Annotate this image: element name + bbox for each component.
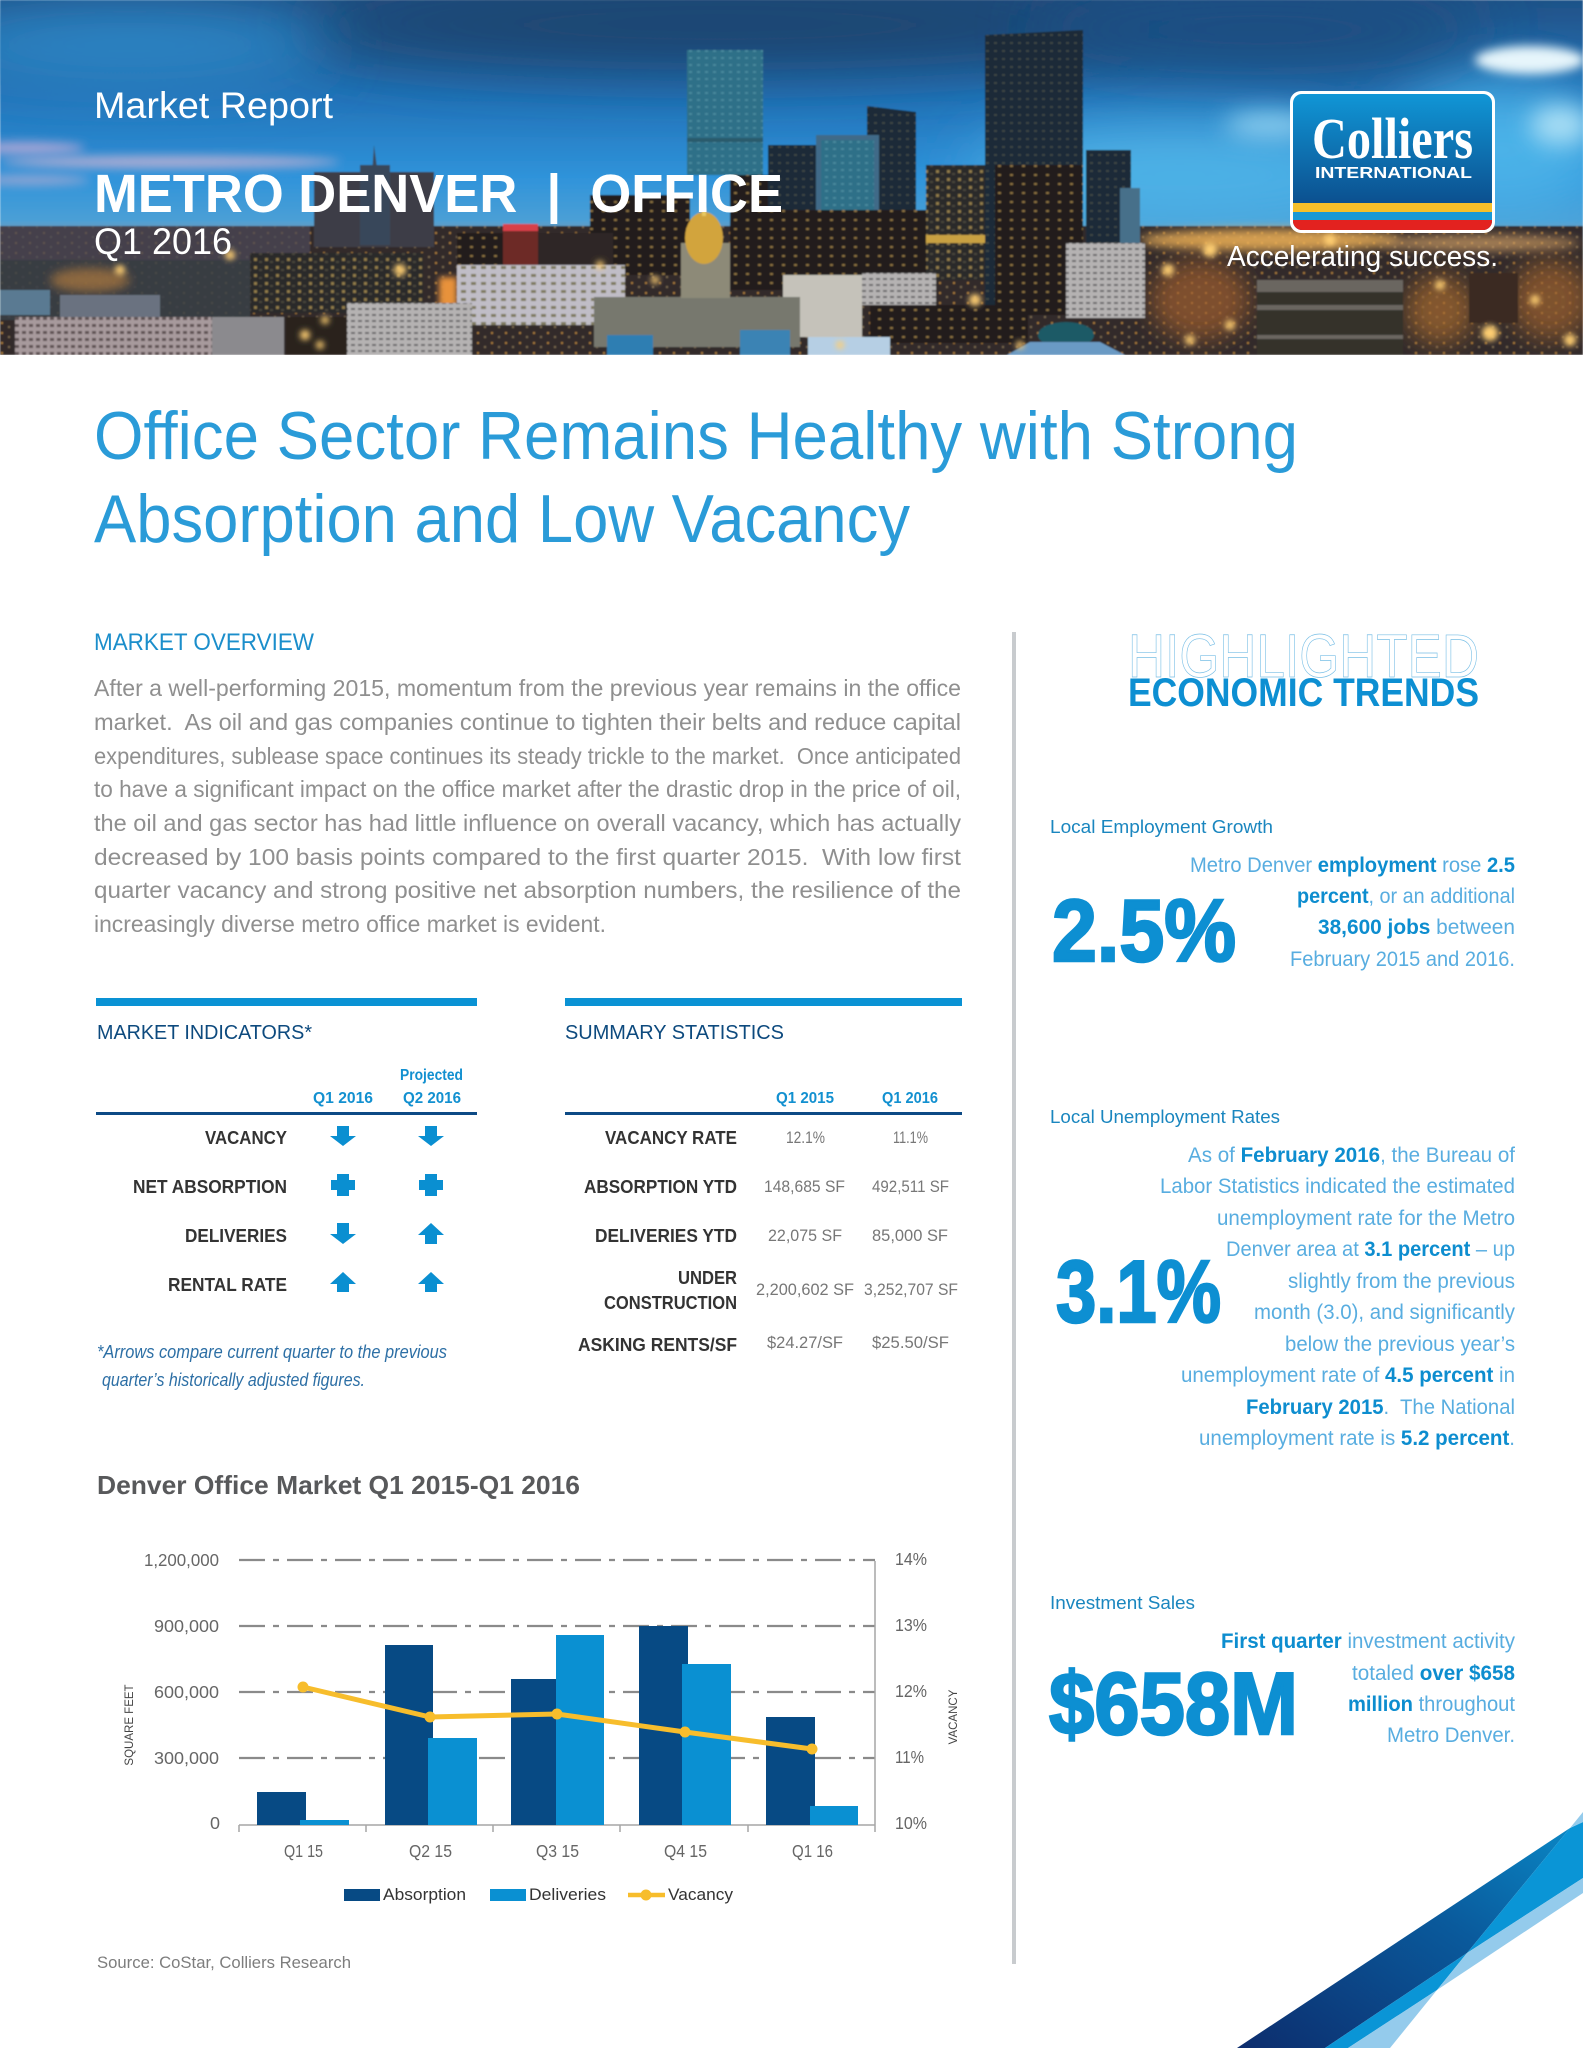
heading: summary statistics: SUMMARY STATISTICS (565, 1022, 784, 1044)
panel: local employment growth: Local Employment Growth (1050, 816, 1273, 837)
table values: 85,000 SF (872, 1227, 948, 1245)
x axis labels: Q1 15 (284, 1841, 323, 1861)
left axis labels: 0 (210, 1813, 220, 1833)
left axis labels (144, 1550, 220, 1833)
heading: highlighted economic trends: HIGHLIGHTED (1128, 622, 1479, 690)
heading: market indicators: MARKET INDICATORS* (97, 1022, 312, 1044)
table values: 11.1% (893, 1129, 928, 1147)
table values: 2,200,602 SF (756, 1281, 854, 1299)
row labels (578, 1128, 737, 1355)
description: unemployment rate of 4.5 percent in (1181, 1364, 1515, 1387)
column headers (776, 1090, 938, 1107)
description: Denver area at 3.1 percent – up (1226, 1238, 1515, 1261)
Colliers logo: INTERNATIONAL (1315, 165, 1472, 182)
row labels: CONSTRUCTION (604, 1293, 737, 1313)
market overview body text: expenditures, sublease space continues its steady trickle to the market. Once anticipated (94, 743, 961, 769)
icon: deliveries arrows (330, 1223, 444, 1244)
row labels: VACANCY RATE (605, 1128, 737, 1148)
grid lines (239, 1560, 875, 1758)
table values: 3,252,707 SF (864, 1281, 958, 1299)
legend (344, 1886, 734, 1904)
right axis labels: 14% (895, 1549, 927, 1569)
city lights horizon (0, 226, 1583, 355)
market overview body text: the oil and gas sector has had little influence on overall vacancy, which has actually (94, 810, 962, 836)
heading: market overview: MARKET OVERVIEW (94, 629, 314, 656)
header title: Market Report: Market Report (94, 85, 334, 126)
panel: investment sales (1049, 1592, 1515, 1753)
market overview body text: to have a significant impact on the office market after the drastic drop in the price of oil, (94, 776, 961, 802)
description: As of February 2016, the Bureau of (1188, 1144, 1515, 1167)
column headers: Q1 2015 (776, 1090, 834, 1107)
header banner: Denver skyline photo (0, 0, 1583, 355)
glowing street lights (115, 234, 1576, 349)
description: February 2015. The National (1246, 1396, 1515, 1419)
low buildings (0, 210, 1518, 355)
combo chart: absorption, deliveries, vacancy (124, 1549, 960, 1904)
tagline: Accelerating success. (1227, 241, 1498, 273)
corner ribbon graphic (1237, 1812, 1583, 2048)
panel: local unemployment rates: Local Unemployment Rates (1050, 1106, 1280, 1127)
legend: Vacancy (668, 1886, 734, 1904)
absorption bars (257, 1626, 815, 1825)
panel: market indicators (96, 998, 477, 1390)
column headers (313, 1067, 463, 1107)
right axis labels: 12% (895, 1681, 927, 1701)
legend: Deliveries (529, 1886, 606, 1904)
capitol dome (594, 208, 800, 355)
table values: 22,075 SF (768, 1227, 842, 1245)
description: below the previous year’s (1285, 1333, 1515, 1356)
icon: rental rate arrows up (330, 1272, 444, 1292)
right axis labels (895, 1549, 927, 1833)
left axis labels: 1,200,000 (144, 1550, 219, 1570)
main headline (94, 398, 1298, 557)
description: Metro Denver. (1387, 1724, 1515, 1747)
panel: summary statistics (565, 998, 962, 1355)
heading: highlighted economic trends (1128, 622, 1479, 715)
description: percent, or an additional (1297, 885, 1515, 908)
source note: Source: CoStar, Colliers Research (97, 1953, 351, 1972)
row labels: RENTAL RATE (168, 1275, 287, 1295)
market overview body text: increasingly diverse metro office market is evident. (94, 911, 606, 937)
main headline: Office Sector Remains Healthy with Strong (94, 398, 1298, 474)
left axis labels: 300,000 (154, 1748, 219, 1768)
right axis labels: 13% (895, 1615, 927, 1635)
big stat: $658M (1049, 1654, 1298, 1753)
footnote: *Arrows compare current quarter to the previous (97, 1342, 447, 1362)
table values: 12.1% (786, 1129, 825, 1147)
panel: investment sales: Investment Sales (1050, 1592, 1195, 1613)
x axis labels: Q1 16 (792, 1841, 833, 1861)
column headers: Q1 2016 (313, 1090, 373, 1107)
table values: $25.50/SF (872, 1334, 949, 1352)
market overview body text: market. As oil and gas companies continue to tighten their belts and reduce capital (94, 709, 961, 735)
sky clouds (0, 0, 1583, 225)
market overview body text: decreased by 100 basis points compared to the first quarter 2015. With low first (94, 844, 962, 870)
description: Metro Denver employment rose 2.5 (1190, 854, 1515, 877)
row labels: VACANCY (205, 1128, 287, 1148)
legend: Absorption (383, 1886, 466, 1904)
right axis title: VACANCY (948, 1689, 960, 1744)
market overview body text (94, 675, 962, 937)
market overview body text: quarter vacancy and strong positive net absorption numbers, the resilience of the (94, 877, 961, 903)
icon: vacancy arrows down (330, 1126, 444, 1146)
big stat: 2.5% (1052, 881, 1236, 980)
description (1190, 854, 1515, 971)
header date: Q1 2016 (94, 221, 232, 262)
left axis labels: 900,000 (154, 1616, 219, 1636)
chart title: Denver Office Market Q1 2015-Q1 2016 (97, 1470, 580, 1500)
row labels: UNDER (678, 1268, 737, 1288)
left axis title: SQUARE FEET (124, 1684, 136, 1766)
main headline: Absorption and Low Vacancy (94, 481, 910, 557)
x axis labels: Q2 15 (409, 1841, 452, 1861)
description: totaled over $658 (1352, 1662, 1515, 1685)
left axis labels: 600,000 (154, 1682, 219, 1702)
table values: 148,685 SF (764, 1178, 845, 1196)
description: million throughout (1348, 1693, 1515, 1716)
row labels: DELIVERIES (185, 1226, 287, 1246)
table values: 492,511 SF (872, 1178, 949, 1196)
heading: highlighted economic trends: ECONOMIC TRENDS (1128, 671, 1479, 715)
description: slightly from the previous (1288, 1270, 1515, 1293)
table values: $24.27/SF (767, 1334, 843, 1352)
column headers: Q1 2016 (882, 1090, 938, 1107)
description: February 2015 and 2016. (1290, 948, 1515, 971)
footnote: quarter’s historically adjusted figures. (102, 1370, 365, 1390)
icon: net absorption plus signs (331, 1174, 443, 1196)
Colliers logo: Colliers (1312, 106, 1473, 171)
right axis labels: 10% (895, 1813, 927, 1833)
description: 38,600 jobs between (1318, 916, 1515, 939)
description: month (3.0), and significantly (1254, 1301, 1515, 1324)
row labels: ABSORPTION YTD (584, 1177, 737, 1197)
footnote (97, 1342, 447, 1390)
header title: Metro Denver Office: METRO DENVER | OFFICE (94, 164, 783, 225)
description (1221, 1630, 1515, 1747)
row labels: NET ABSORPTION (133, 1177, 287, 1197)
Colliers logo (1290, 91, 1495, 233)
description: unemployment rate is 5.2 percent. (1199, 1427, 1515, 1450)
x axis labels: Q4 15 (664, 1841, 707, 1861)
right axis labels: 11% (895, 1747, 924, 1767)
description: Labor Statistics indicated the estimated (1160, 1175, 1515, 1198)
market overview body text: After a well-performing 2015, momentum from the previous year remains in the office (94, 675, 961, 701)
row labels: ASKING RENTS/SF (578, 1335, 737, 1355)
row labels (133, 1128, 287, 1295)
row labels: DELIVERIES YTD (595, 1226, 737, 1246)
column headers: Projected (400, 1067, 463, 1084)
x axis labels (284, 1841, 833, 1861)
column headers: Q2 2016 (403, 1090, 461, 1107)
big stat: 3.1% (1056, 1242, 1221, 1341)
description: unemployment rate for the Metro (1217, 1207, 1515, 1230)
panel: local unemployment rates (1050, 1106, 1515, 1450)
skyscrapers (314, 30, 1140, 315)
vacancy line (298, 1682, 818, 1754)
description: First quarter investment activity (1221, 1630, 1515, 1653)
description (1160, 1144, 1515, 1450)
x axis labels: Q3 15 (536, 1841, 579, 1861)
table values (756, 1129, 958, 1352)
panel: local employment growth (1050, 816, 1515, 980)
deliveries bars (300, 1635, 858, 1825)
